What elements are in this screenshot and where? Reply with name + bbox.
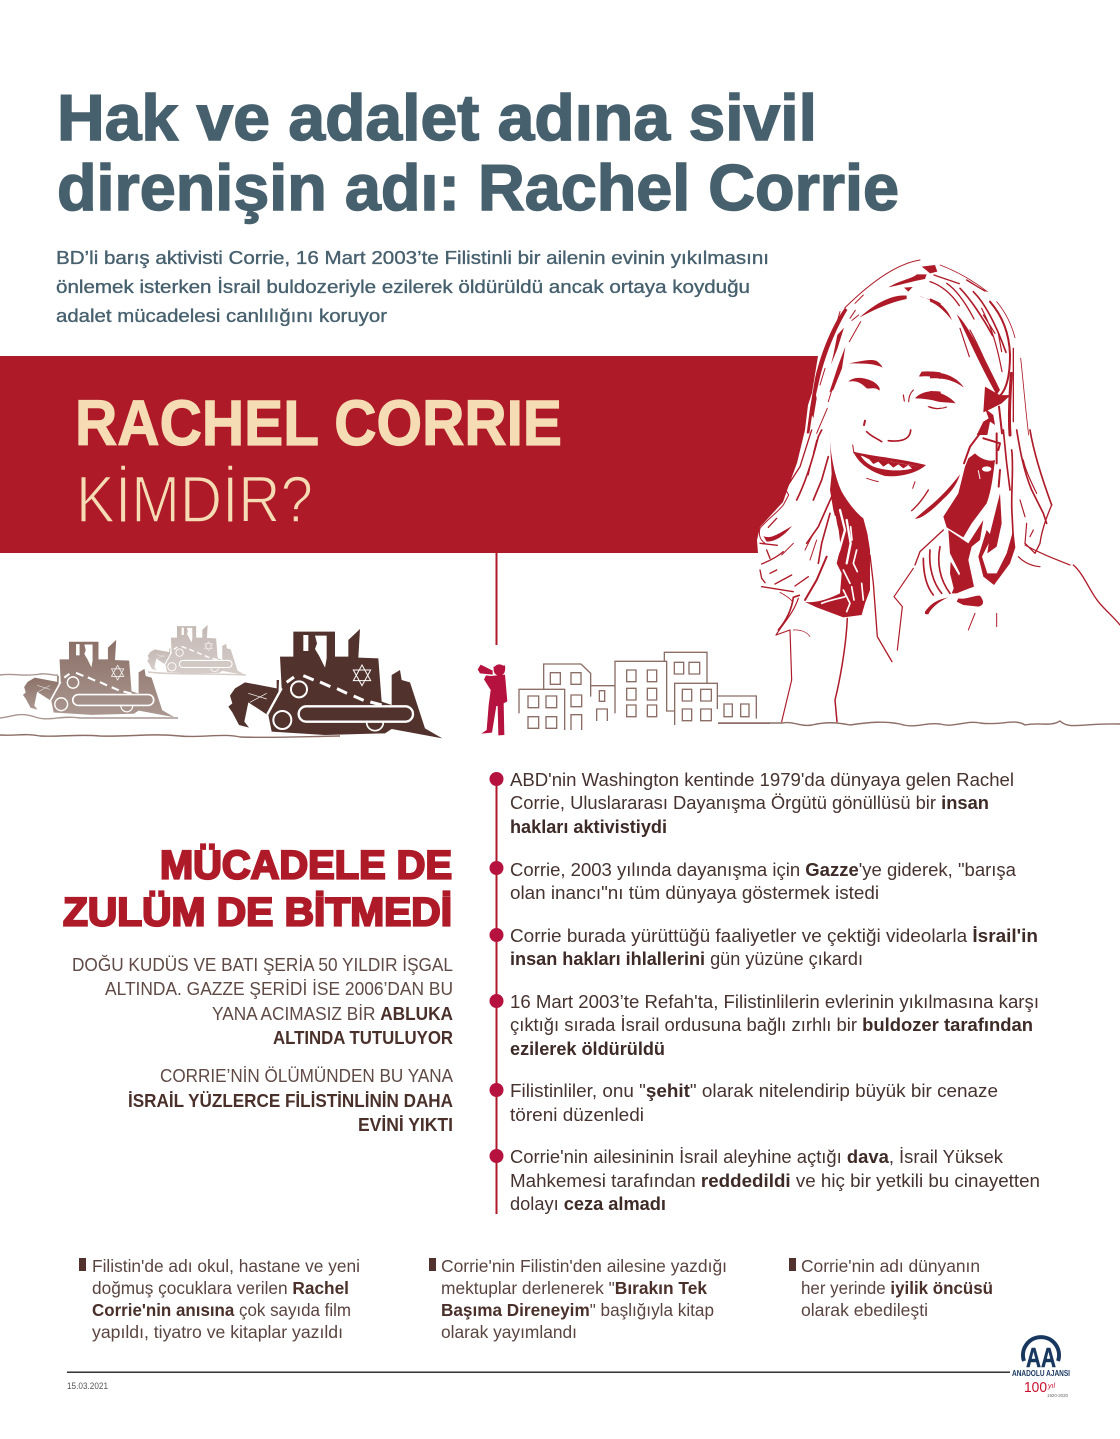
portrait: neck, collar and shoulder lines [776, 555, 1120, 722]
timeline item 6: Mahkemesi tarafından reddedildi ve hiç bir yetkili bu cinayetten [510, 1170, 1040, 1191]
left text block: İSRAİL YÜZLERCE FİLİSTİNLİNİN DAHA [128, 1091, 453, 1111]
bottom note 2: Corrie'nin Filistin'den ailesine yazdığı [441, 1256, 727, 1276]
timeline item 1: hakları aktivistiydi [510, 816, 667, 837]
timeline item 4: çıktığı sırada İsrail ordusuna bağlı zırhlı bir buldozer tarafından [510, 1014, 1033, 1035]
timeline item 5: Filistinliler, onu "şehit" olarak nitelendirip büyük bir cenaze [510, 1080, 998, 1101]
left text block: YANA ACIMASIZ BİR ABLUKA [212, 1004, 453, 1024]
ground lines [0, 672, 1120, 737]
timeline item 2: olan inancı"nı tüm dünyaya göstermek istedi [510, 882, 879, 903]
logo: Anadolu Ajansı: 100 [1024, 1379, 1047, 1396]
icon: medium bulldozer [23, 640, 174, 717]
timeline item 4: ezilerek öldürüldü [510, 1038, 665, 1059]
left heading: MÜCADELE DE [160, 842, 452, 888]
bottom note 3: her yerinde iyilik öncüsü [801, 1278, 993, 1298]
timeline item 6 [510, 1146, 1040, 1214]
timeline item 3 [510, 925, 1038, 969]
title: Hak ve adalet adına sivil [57, 81, 817, 154]
portrait: upper left hair and left eye [807, 260, 941, 433]
logo: Anadolu Ajansı: yıl [1047, 1383, 1055, 1390]
timeline item 1: ABD'nin Washington kentinde 1979'da dünyaya gelen Rachel [510, 769, 1014, 790]
timeline item 2 [510, 859, 1017, 903]
icon: large bulldozer [228, 629, 442, 738]
subtitle text block: önlemek isterken İsrail buldozeriyle ezilerek öldürüldü ancak ortaya koyduğu [56, 276, 750, 297]
portrait: lower left hair [759, 430, 870, 630]
logo: Anadolu Ajansı [1012, 1337, 1070, 1398]
banner heading: RACHEL CORRIE [75, 387, 562, 459]
bottom note 3 [789, 1256, 993, 1320]
portrait: upper right hair [930, 265, 1029, 435]
bottom note 2: olarak yayımlandı [441, 1322, 577, 1342]
logo: Anadolu Ajansı: ANADOLU AJANSI [1012, 1368, 1070, 1378]
timeline item 4 [510, 991, 1039, 1059]
left text block: EVİNİ YIKTI [358, 1115, 453, 1135]
left text block: ALTINDA TUTULUYOR [273, 1028, 453, 1048]
bottom note 1: Filistin'de adı okul, hastane ve yeni [92, 1256, 360, 1276]
icon: small bulldozer [147, 625, 246, 675]
title: direnişin adı: Rachel Corrie [57, 151, 899, 224]
buildings illustration [519, 652, 770, 730]
icon: figure with megaphone [478, 664, 507, 735]
timeline [490, 772, 504, 1214]
banner heading: KİMDİR? [76, 462, 313, 536]
date: 15.03.2021 [67, 1381, 108, 1392]
bottom note 2: mektuplar derlenerek "Bırakın Tek [441, 1278, 707, 1298]
panel: red banner [0, 356, 818, 553]
bottom note 3: Corrie'nin adı dünyanın [801, 1256, 980, 1276]
portrait: nose and mouth [853, 421, 926, 482]
timeline item 6: dolayı ceza almadı [510, 1193, 666, 1214]
logo: Anadolu Ajansı: AA [1026, 1342, 1056, 1373]
bottom note 1: yapıldı, tiyatro ve kitaplar yazıldı [92, 1322, 343, 1342]
bottom note 2 [429, 1256, 727, 1342]
subtitle text block: BD’li barış aktivisti Corrie, 16 Mart 2003’te Filistinli bir ailenin evinin yıkılmasını [56, 247, 769, 268]
timeline item 4: 16 Mart 2003’te Refah'ta, Filistinlilerin evlerinin yıkılmasına karşı [510, 991, 1039, 1012]
timeline item 3: Corrie burada yürüttüğü faaliyetler ve çektiği videolarla İsrail'in [510, 925, 1038, 946]
left heading: ZULÜM DE BİTMEDİ [63, 890, 452, 934]
left heading [63, 842, 452, 934]
timeline item 3: insan hakları ihlallerini gün yüzüne çıkardı [510, 948, 863, 969]
banner heading [75, 387, 562, 536]
bottom note 3: olarak ebedileşti [801, 1300, 928, 1320]
left text block: ALTINDA. GAZZE ŞERİDİ İSE 2006’DAN BU [105, 979, 453, 999]
bottom note 1: doğmuş çocuklara verilen Rachel [92, 1278, 349, 1298]
logo: Anadolu Ajansı: 1920-2020 [1047, 1393, 1068, 1398]
timeline item 2: Corrie, 2003 yılında dayanışma için Gazze'ye giderek, "barışa [510, 859, 1017, 880]
left text block: CORRIE’NİN ÖLÜMÜNDEN BU YANA [160, 1066, 454, 1086]
timeline item 1 [510, 769, 1014, 837]
bottom note 1 [79, 1256, 360, 1342]
portrait: lower right hair and chin shadow [912, 430, 1070, 630]
timeline item 5 [510, 1080, 998, 1125]
title [57, 81, 899, 224]
timeline item 6: Corrie'nin ailesininin İsrail aleyhine açtığı dava, İsrail Yüksek [510, 1146, 1004, 1167]
bottom note 2: Başıma Direneyim" başlığıyla kitap [441, 1300, 714, 1320]
subtitle text block [56, 247, 769, 326]
timeline item 1: Corrie, Uluslararası Dayanışma Örgütü gönüllüsü bir insan [510, 792, 989, 813]
bottom note 1: Corrie'nin anısına çok sayıda film [92, 1300, 351, 1320]
subtitle text block: adalet mücadelesi canlılığını koruyor [56, 305, 387, 326]
left text block: DOĞU KUDÜS VE BATI ŞERİA 50 YILDIR İŞGAL [72, 954, 453, 975]
footer rule [67, 1372, 1010, 1373]
timeline item 5: töreni düzenledi [510, 1104, 644, 1125]
connector line [496, 553, 498, 645]
left text block [72, 954, 454, 1135]
portrait illustration [759, 260, 1120, 722]
